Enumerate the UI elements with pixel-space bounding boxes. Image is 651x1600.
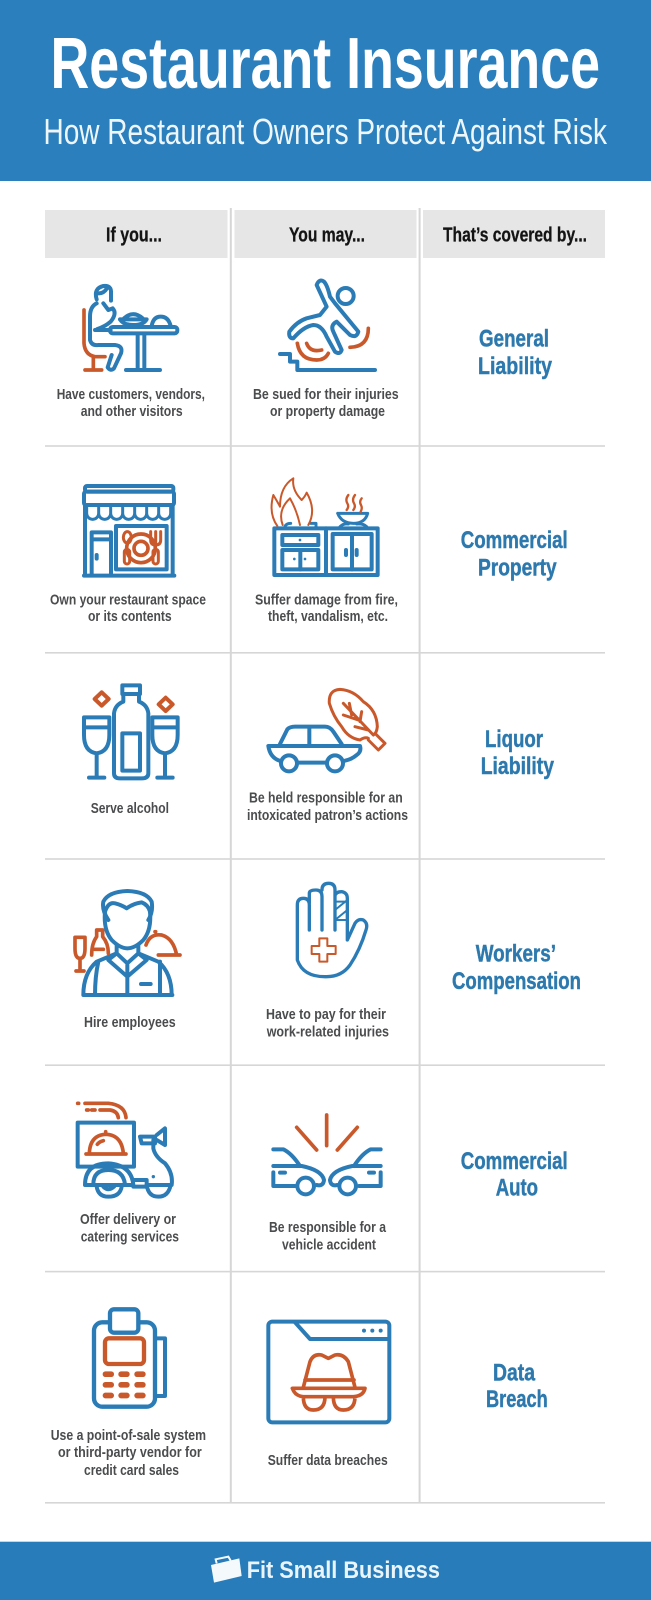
text: if you: Offer delivery or — [80, 1211, 176, 1228]
text: you may: Be held responsible for an — [249, 790, 403, 807]
row: liquor liability — [84, 685, 555, 824]
label: coverage: Compensation — [452, 968, 581, 995]
text: you may: Be sued for their injuries — [253, 386, 399, 403]
label: coverage — [486, 1360, 548, 1413]
text: if you — [80, 1211, 179, 1246]
text: if you: or its contents — [88, 608, 172, 625]
text: if you: catering services — [81, 1229, 179, 1246]
label: coverage — [481, 726, 555, 780]
text: you may — [253, 386, 399, 420]
header banner — [0, 0, 651, 181]
text: if you: Use a point-of-sale system — [51, 1427, 206, 1444]
icon: waiter — [75, 891, 180, 995]
label: coverage: Property — [478, 555, 557, 582]
text: if you — [50, 591, 206, 625]
label: coverage: Commercial — [461, 527, 568, 554]
label: coverage — [452, 941, 581, 995]
column heading: You may — [234, 210, 416, 258]
text: if you: Have customers, vendors, — [57, 386, 205, 403]
text: if you: Hire employees — [84, 1014, 176, 1031]
text: you may: Be responsible for a — [269, 1219, 387, 1236]
label: coverage: Liability — [478, 353, 553, 380]
label: coverage: Breach — [486, 1386, 548, 1413]
label: coverage: Auto — [496, 1175, 538, 1202]
icon: briefcase logo — [211, 1557, 242, 1583]
text: if you — [51, 1427, 206, 1479]
column heading: If you — [45, 210, 228, 258]
text: you may: or property damage — [270, 403, 385, 420]
icon: car collision — [273, 1115, 381, 1194]
label: coverage: Liquor — [485, 726, 543, 753]
label: coverage — [461, 1148, 568, 1202]
label: coverage: Liability — [481, 753, 555, 780]
text: you may: theft, vandalism, etc. — [268, 608, 388, 625]
column heading: If you: If you... — [106, 224, 162, 246]
row: data breach — [51, 1309, 548, 1479]
icon: car hitting tree — [268, 689, 385, 771]
icon: kitchen fire — [272, 478, 378, 575]
text: you may: Suffer damage from fire, — [255, 591, 398, 608]
text: if you: Serve alcohol — [91, 800, 169, 817]
column heading: That's covered by: That’s covered by... — [443, 224, 587, 246]
text: if you: credit card sales — [84, 1462, 179, 1479]
table grid lines — [45, 208, 605, 1504]
label: coverage — [461, 527, 568, 582]
text: if you: Own your restaurant space — [50, 591, 206, 608]
label: coverage: Commercial — [461, 1148, 568, 1175]
text: you may — [247, 790, 408, 824]
label: coverage — [478, 326, 553, 380]
row: commercial property — [50, 478, 568, 625]
text: you may — [255, 591, 398, 625]
text: if you: or third-party vendor for — [58, 1444, 202, 1461]
text: if you — [57, 386, 205, 420]
icon: injured hand — [297, 883, 367, 977]
row: general liability — [57, 281, 553, 420]
label: coverage: Workers’ — [476, 941, 556, 968]
icon: card terminal — [94, 1309, 165, 1407]
text: you may: Have to pay for their — [266, 1006, 386, 1023]
text: you may — [269, 1219, 387, 1254]
icon: delivery scooter — [78, 1103, 172, 1197]
text: you may: work-related injuries — [266, 1024, 389, 1041]
text: if you: and other visitors — [81, 403, 183, 420]
text: you may: intoxicated patron’s actions — [247, 807, 408, 824]
icon: hacker window — [268, 1322, 389, 1422]
label: coverage: General — [479, 326, 549, 353]
column heading: You may: You may... — [289, 224, 365, 246]
text: you may — [266, 1006, 389, 1041]
label: coverage: Data — [493, 1360, 536, 1387]
brand name: Fit Small Business — [247, 1557, 440, 1584]
column heading: That's covered by — [423, 210, 605, 258]
row: workers' compensation — [75, 883, 581, 1041]
footer banner — [0, 1542, 651, 1600]
text: you may: Suffer data breaches — [268, 1452, 388, 1469]
icon: storefront — [84, 486, 174, 576]
icon: person falling — [280, 281, 375, 370]
text: you may: vehicle accident — [282, 1237, 376, 1254]
icon: diner at table — [84, 286, 177, 370]
icon: bottle and glasses — [84, 685, 178, 778]
row: commercial auto — [78, 1103, 568, 1254]
